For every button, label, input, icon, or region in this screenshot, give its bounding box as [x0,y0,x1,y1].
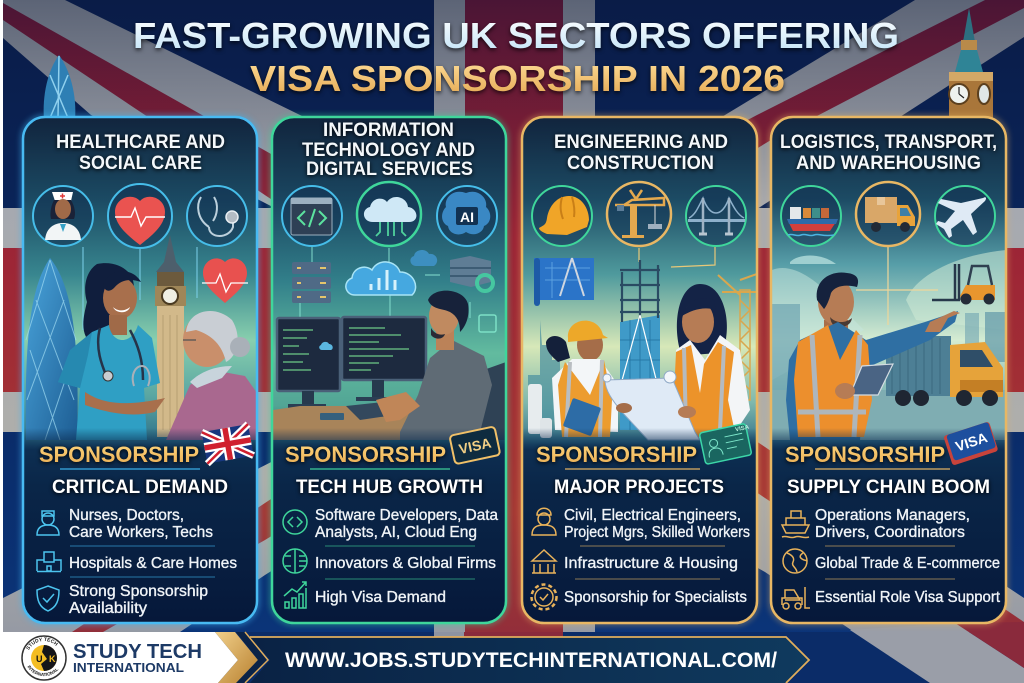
icon: stethoscope [187,186,247,246]
panel heading [554,132,728,174]
icon: delivery truck [856,182,920,246]
list item: demand: High Visa Demand [315,589,446,606]
list item: roles: Project Mgrs, Skilled Workers [564,524,750,541]
panel heading: HEALTHCARE AND [56,132,225,153]
title: VISA SPONSORSHIP IN 2026 [250,58,785,99]
scene: truck [886,336,1003,406]
panel heading: TECHNOLOGY AND [302,140,475,161]
list item: trade [783,549,1000,573]
list item: availability: Strong Sponsorship [69,583,208,600]
list item: roles: Operations Managers, [815,507,970,524]
scene: monitors with code [277,317,426,408]
icon: AI brain [437,186,497,246]
logo: Study Tech International seal [21,635,67,681]
list item: availability: Availability [69,600,147,617]
subheading: CRITICAL DEMAND [52,477,228,498]
subheading: MAJOR PROJECTS [554,477,724,498]
icon: UK flag badge [202,424,254,464]
panel: Engineering and Construction [522,117,757,623]
icon: visa card with flag stripes [943,421,998,466]
footer: website banner: WWW.JOBS.STUDYTECHINTERNATIONAL.COM/ [285,649,777,672]
list item: roles: Nurses, Doctors, [69,507,184,524]
icon: AI brain: AI [460,209,474,225]
panel heading [302,120,475,180]
landmark: Gherkin tower behind title [44,55,75,120]
scene: engineer with hard hat [546,321,618,437]
list item: employers: Innovators & Global Firms [315,555,496,572]
panel: Information Technology and Digital Services [272,117,506,623]
logo: Study Tech International seal: K [49,654,56,664]
scene: crane [528,274,757,438]
logo: Study Tech International seal: STUDY TECH [26,638,58,650]
icon: code window [282,186,342,246]
subheading: TECH HUB GROWTH [296,477,483,498]
icon: visa card: VISA [457,435,493,457]
scene: tower under construction [618,260,660,430]
icon: tower crane [607,182,671,246]
logo: Study Tech International seal: INTERNATIONAL [28,665,58,676]
scene: Gherkin, Big Ben and heart [26,235,248,440]
list item: roles: Software Developers, Data [315,507,498,524]
list item: roles [283,507,498,541]
scene: unrolled plans [603,371,700,440]
icon: cloud circuit [357,182,421,246]
footer: logo plate [0,632,258,683]
scene: desk and keyboard [273,402,409,440]
list item: essential roles [782,587,1001,609]
logo wordmark: STUDY TECH [73,641,202,663]
list item: essential roles: Essential Role Visa Support [815,589,1001,606]
panel heading: INFORMATION [323,120,454,141]
scene: nurse [58,263,165,440]
scene: elderly patient [166,311,262,440]
icon: cargo ship [781,186,841,246]
list item: roles: Civil, Electrical Engineers, [564,507,741,524]
panel heading [56,132,225,174]
panel: Logistics, Transport and Warehousing [771,117,1006,623]
list item: trade: Global Trade & E-commerce [815,555,1000,572]
list item: specialists [532,584,747,610]
scene: forklift [932,264,995,304]
list item: employers: Hospitals & Care Homes [69,555,237,572]
scene: servers and cloud [292,247,496,332]
panel heading: DIGITAL SERVICES [306,159,473,180]
list item: availability [37,583,208,617]
icon: nurse [33,186,93,246]
list item: roles [37,507,213,541]
sponsorship label: SPONSORSHIP [536,442,697,467]
list item: roles: Care Workers, Techs [69,524,213,541]
list item: demand [284,582,446,608]
panel heading: AND WAREHOUSING [796,153,981,174]
panel heading: ENGINEERING AND [554,132,728,153]
title: FAST-GROWING UK SECTORS OFFERING [133,15,899,56]
scene: clouds, skyline and road [772,247,1006,440]
icon: visa card [449,426,500,464]
list item: specialists: Sponsorship for Specialists [564,589,747,606]
subheading: SUPPLY CHAIN BOOM [787,477,990,498]
icon: heart with pulse [108,184,172,248]
footer: website banner [236,632,809,683]
sponsorship label: SPONSORSHIP [285,442,446,467]
logo wordmark [73,641,202,675]
panel heading: CONSTRUCTION [567,153,714,174]
list item: sectors [532,550,738,573]
landmark: Big Ben behind title [949,8,993,122]
scene: developer [376,291,506,440]
list item: employers [283,549,496,573]
scene: logistics manager pointing [786,272,960,440]
sponsorship label: SPONSORSHIP [39,442,199,467]
panel heading [780,132,997,174]
panel: Healthcare and Social Care [23,117,262,623]
list item: roles: Drivers, Coordinators [815,524,965,541]
icon: airplane [935,186,995,246]
logo wordmark: INTERNATIONAL [73,661,184,675]
title [133,15,899,99]
scene: engineer with long hair [672,284,750,440]
logo: Study Tech International seal: U [36,654,42,664]
list item: roles [532,507,750,541]
list item: roles: Analysts, AI, Cloud Eng [315,524,477,541]
icon: hard hat [532,186,592,246]
list item: sectors: Infrastructure & Housing [564,555,738,572]
icon: visa ID card: VISA [735,425,750,433]
icon: suspension bridge [686,186,746,246]
list item: roles [782,507,970,541]
panel heading: SOCIAL CARE [79,153,202,174]
scene: blueprint and skyline [528,247,715,420]
icon: visa ID card [699,423,755,464]
icon: visa card with flag stripes: VISA [953,429,989,454]
panel heading: LOGISTICS, TRANSPORT, [780,132,997,153]
sponsorship label: SPONSORSHIP [785,442,945,467]
